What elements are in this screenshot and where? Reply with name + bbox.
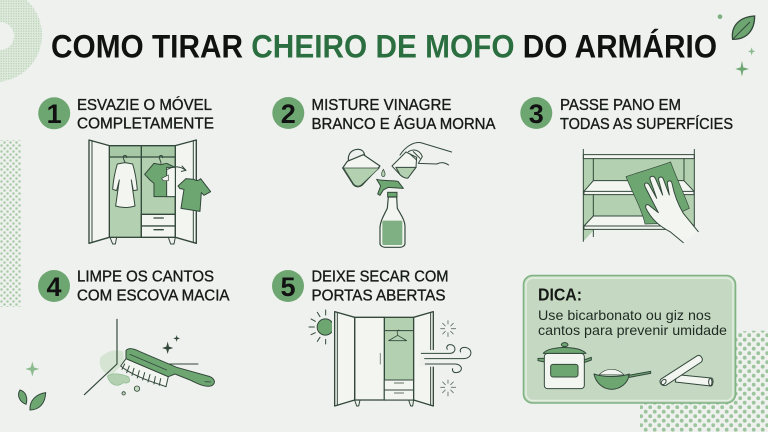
panel heading: DICA: [538,284,582,304]
icon: wardrobe with clothes [89,140,211,244]
number badge 3: 3 [529,99,544,129]
number badge 1: 1 [47,99,62,129]
title: COMO TIRAR CHEIRO DE MOFO DO ARMÁRIO [51,28,717,64]
step 1 [38,95,214,244]
number badge 3 [520,97,552,129]
heading step 5: PORTAS ABERTAS [312,288,446,304]
number badge 5 [272,270,304,302]
panel inner highlight [526,278,733,400]
decorative halftone ring top left [0,0,42,82]
number badge 2: 2 [281,99,296,129]
number badge 5: 5 [280,272,296,302]
icon: pouring vinegar into spray bottle [343,142,452,247]
step 3 [520,97,733,243]
heading step 1: ESVAZIE O MÓVEL [77,95,212,114]
icon: open wardrobe drying with sun and wind [309,310,471,406]
decorative dot strip left [0,140,21,307]
step 4 [38,269,230,395]
panel: dica [524,276,736,403]
panel text: cantos para prevenir umidade [538,322,727,338]
step 5 [272,269,471,406]
number badge 2 [272,97,304,129]
decorative halftone bottom right [640,325,768,432]
heading step 3: TODAS AS SUPERFÍCIES [560,114,733,133]
icon: decorative leaves and sparkle bottom left [19,362,46,410]
step 2 [272,97,496,247]
panel text: Use bicarbonato ou giz nos [538,307,711,323]
number badge 4 [38,270,70,302]
heading step 1: COMPLETAMENTE [77,116,214,132]
panel box [524,276,736,403]
heading step 5: DEIXE SECAR COM [312,269,448,286]
icon: pot, bowl and chalk [538,343,713,389]
heading step 3: PASSE PANO EM [560,97,681,114]
icon: hand wiping shelves with cloth [583,149,698,243]
heading step 2: BRANCO E ÁGUA MORNA [312,114,496,133]
number badge 4: 4 [46,272,62,302]
icon: decorative leaf top right [718,14,755,77]
heading step 4: LIMPE OS CANTOS [77,269,214,286]
number badge 1 [38,97,70,129]
heading step 4: COM ESCOVA MACIA [77,288,230,304]
icon: brush cleaning corner [84,319,214,395]
heading step 2: MISTURE VINAGRE [312,97,452,114]
